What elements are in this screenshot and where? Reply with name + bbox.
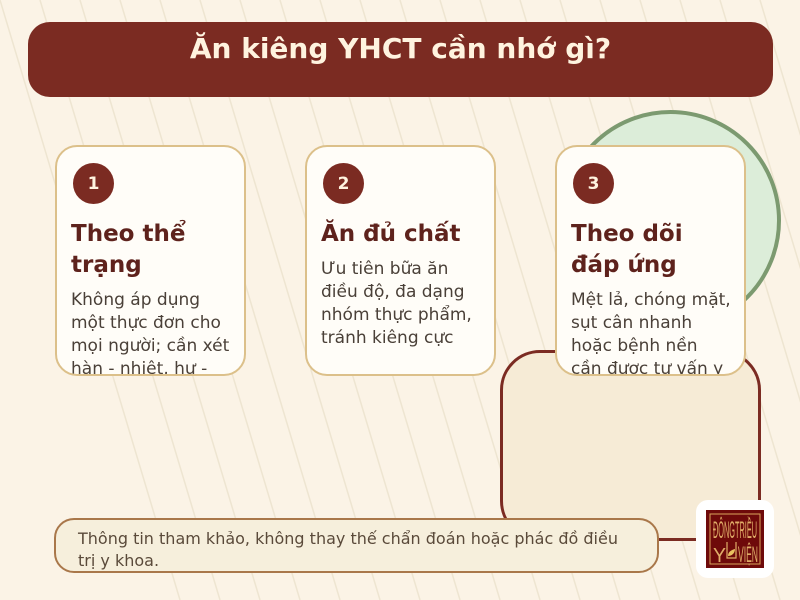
title banner [28, 22, 773, 97]
card 2 heading: Ăn đủ chất [321, 221, 461, 247]
beige rounded panel [500, 350, 761, 541]
number badge 2: 2 [338, 174, 349, 194]
logo badge [696, 500, 774, 578]
card 2 text: Ưu tiên bữa ăn điều độ, đa dạng nhóm thực phẩm, tránh kiêng cực [321, 259, 472, 348]
logo badge: Y [713, 545, 726, 567]
panel: card 3 [555, 145, 746, 376]
number badge 1 [73, 163, 114, 204]
number badge 3 [573, 163, 614, 204]
card 1 heading: Theo thể trạng [71, 221, 185, 278]
number badge 2 [323, 163, 364, 204]
title banner: Ăn kiêng YHCT cần nhớ gì? [190, 32, 611, 65]
panel: card 1 [55, 145, 246, 376]
number badge 3: 3 [588, 174, 599, 194]
disclaimer note: Thông tin tham khảo, không thay thế chẩn đoán hoặc phác đồ điều trị y khoa. [78, 529, 618, 570]
disclaimer note [54, 518, 659, 573]
decorative green circle [560, 110, 781, 331]
card 3 heading: Theo dõi đáp ứng [571, 221, 683, 278]
panel: card 2 [305, 145, 496, 376]
number badge 1: 1 [88, 174, 99, 194]
